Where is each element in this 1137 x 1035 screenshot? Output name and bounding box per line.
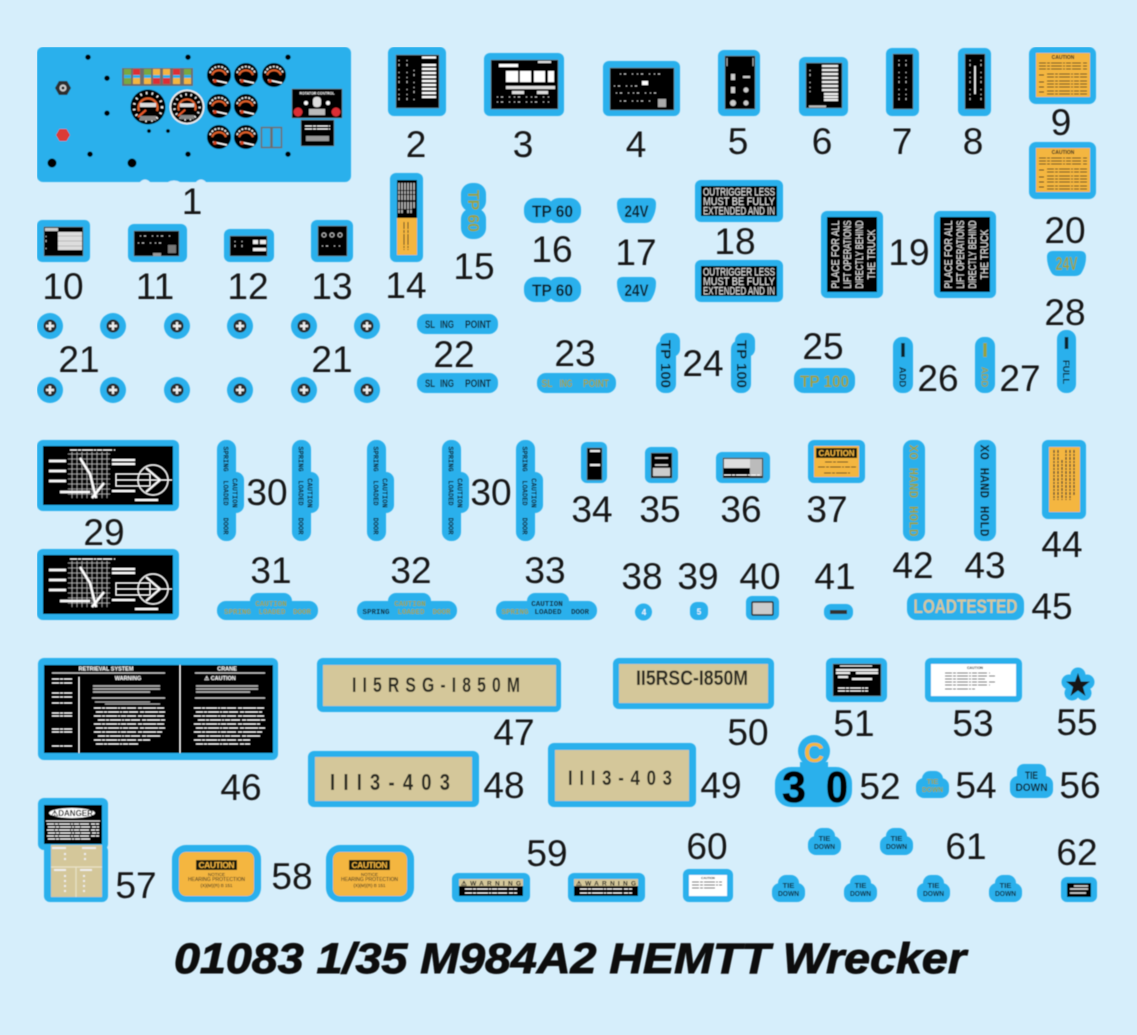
decal 32: [357, 593, 457, 620]
decal 33: [496, 593, 597, 620]
warning light strip: [122, 68, 193, 86]
decal 54: [916, 771, 949, 798]
label 30 right: 30: [470, 472, 512, 513]
label 31: 31: [250, 550, 292, 591]
decal 9: [1029, 47, 1096, 104]
decal 32: LOADED: [397, 609, 425, 617]
label 18: 18: [714, 221, 756, 262]
decal 24 left: TP 100: [658, 340, 674, 388]
decal 42: [903, 440, 925, 541]
label 40: 40: [739, 556, 781, 597]
label 34: 34: [571, 489, 613, 530]
decal 24 right: TP 100: [734, 340, 750, 388]
decal 46: WARNING: [115, 676, 141, 682]
decal 22 top: POINT: [465, 319, 491, 331]
label 53: 53: [952, 703, 994, 744]
label 16: 16: [531, 229, 573, 270]
decal 24V olive: [1047, 251, 1086, 276]
decal 46: CRANE: [217, 666, 237, 672]
label 17: 17: [615, 232, 657, 273]
decal 28: FULL: [1060, 360, 1071, 384]
decal 22 top: SL: [425, 319, 435, 331]
decal 60: CAUTION: [701, 876, 715, 880]
decal 41: [824, 604, 853, 620]
decal 50: II5RSC-I850M: [636, 667, 748, 690]
decal 25: TP 100: [800, 372, 849, 391]
decal 58 right: HEARING PROTECTION: [341, 877, 398, 883]
decal 31: LOADED: [258, 609, 286, 617]
label 37: 37: [806, 489, 848, 530]
label 44: 44: [1041, 524, 1083, 565]
label 23: 23: [554, 333, 596, 374]
decal 19 right: DIRECTLY BEHIND: [967, 220, 979, 288]
label 1: 1: [182, 181, 202, 222]
label 48: 48: [483, 765, 525, 806]
decal 58 right: (X)(M)(R) B 151: [353, 883, 386, 888]
decal 18 top: OUTRIGGER LESS: [703, 186, 775, 198]
label 38: 38: [621, 556, 663, 597]
control plate with red knobs: [292, 89, 342, 118]
decal 58 left: CAUTION: [198, 860, 234, 870]
decal 24 left: [656, 333, 680, 393]
decal 15: [461, 183, 486, 239]
label 14: 14: [385, 265, 427, 306]
title: 01083 1/35 M984A2 HEMTT Wrecker: [174, 935, 968, 983]
decal 42: XO HAND HOLD: [906, 444, 920, 537]
icon: red hexagon: [56, 129, 70, 141]
label 52: 52: [859, 766, 901, 807]
decal 57: ⚠DANGER: [51, 809, 93, 818]
label 25: 25: [802, 326, 844, 367]
decal 23: POINT: [583, 378, 609, 390]
decal 16 top: [524, 198, 581, 223]
decal 33: CAUTION: [531, 601, 563, 609]
decal 47: [317, 658, 561, 712]
label 27: 27: [999, 358, 1041, 399]
decal 32: SPRING: [362, 609, 390, 617]
label 35: 35: [639, 489, 681, 530]
decal 22 bottom: ING: [440, 378, 454, 390]
decal 22 bottom: POINT: [465, 378, 491, 390]
label 54: 54: [955, 765, 997, 806]
decal 53: [925, 658, 1022, 702]
decal 4: [603, 61, 680, 116]
decal 17 bottom: 24V: [624, 281, 649, 300]
decal 50: [613, 658, 774, 709]
decal 12: [224, 229, 274, 262]
label 22: 22: [433, 334, 475, 375]
decal 38: 4: [642, 608, 647, 617]
decal 39: 5: [697, 608, 702, 616]
decal 55: star: [1062, 668, 1094, 700]
decal 56: [1010, 764, 1053, 798]
decal 19 right: [934, 211, 996, 298]
label 7: 7: [892, 121, 912, 162]
label 50: 50: [727, 712, 769, 753]
decal 47: II5RSG-I850M: [352, 673, 520, 697]
decal 22 top: [417, 314, 498, 334]
decal 16 top: TP 60: [532, 202, 573, 221]
decal 20 caution: [1029, 142, 1096, 199]
decal 7: [886, 48, 919, 116]
label 55: 55: [1056, 702, 1098, 743]
decal 25: [794, 368, 855, 393]
twin switches: [262, 128, 282, 148]
decal 48: [308, 751, 479, 807]
decal 19 left: [821, 211, 883, 298]
decal 19 left: LIFT OPERATIONS: [842, 220, 854, 288]
decal 23: SL: [542, 378, 553, 390]
decal 18 bottom: MUST BE FULLY: [703, 276, 776, 288]
decal 46: ⚠ CAUTION: [204, 675, 236, 682]
decal 8: [958, 48, 991, 116]
decal 45: [907, 593, 1024, 620]
decal 26: [893, 337, 913, 393]
label 61: 61: [945, 826, 987, 867]
decal 19 right: THE TRUCK: [979, 229, 991, 280]
label 51: 51: [833, 703, 875, 744]
label 39: 39: [677, 556, 719, 597]
decal 18 bottom: OUTRIGGER LESS: [703, 266, 775, 278]
decal 18 top: EXTENDED AND IN: [703, 206, 775, 218]
label 19: 19: [888, 232, 930, 273]
decal 59 right: [568, 873, 645, 902]
decal 17 top: [617, 198, 656, 223]
label 41: 41: [814, 556, 856, 597]
label 15: 15: [453, 246, 495, 287]
decal 16 bottom: TP 60: [532, 281, 573, 300]
decal 24V olive: 24V: [1056, 254, 1078, 274]
decal 53: CAUTION: [967, 666, 983, 670]
decal 19 left: THE TRUCK: [866, 229, 878, 280]
decal 10: [37, 220, 90, 262]
decal 59 left: ⚠WARNING: [461, 880, 521, 888]
decal 24 right: [731, 333, 755, 393]
decal 58 left: HEARING PROTECTION: [188, 877, 245, 883]
decal 1: instrument panel: [37, 47, 351, 182]
decal 31: DOOR: [293, 609, 311, 617]
decal 52: [775, 735, 852, 812]
decal 5: [718, 50, 760, 116]
label 57: 57: [115, 865, 157, 906]
label 58: 58: [271, 856, 313, 897]
label 33: 33: [524, 550, 566, 591]
decal 45: LOADTESTED: [914, 597, 1018, 618]
label 12: 12: [227, 266, 269, 307]
decal 31: [217, 593, 318, 620]
decal 31: CAUTION: [255, 601, 287, 609]
decal 19 right: PLACE FOR ALL: [943, 220, 955, 288]
decal 17 top: 24V: [624, 202, 649, 221]
decal 38: [635, 604, 652, 620]
decal 22 top: ING: [440, 319, 454, 331]
label 20: 20: [1044, 210, 1086, 251]
label 3: 3: [513, 124, 533, 165]
decal 29 bottom: [37, 549, 179, 620]
decal 28: [1057, 330, 1076, 393]
label 36: 36: [720, 489, 762, 530]
decal 37: CAUTION: [818, 449, 855, 458]
decal 18 top: [695, 180, 783, 222]
decal 59 right: ⚠WARNING: [576, 880, 636, 888]
decal 27: ADD: [978, 367, 990, 387]
decal 40: [746, 596, 779, 620]
decal 17 bottom: [617, 277, 656, 302]
decal 19 right: LIFT OPERATIONS: [955, 220, 967, 288]
decal 49: III3-403: [568, 767, 672, 791]
decal 58 right: NOTICE: [361, 872, 378, 877]
decal 32: CAUTION: [394, 601, 426, 609]
decal 9: CAUTION: [1052, 55, 1075, 61]
label 46: 46: [220, 767, 262, 808]
decal 6: [799, 57, 848, 116]
label 11: 11: [136, 266, 174, 307]
decal 54: DOWN: [922, 785, 943, 794]
label 30 left: 30: [246, 472, 288, 513]
decal 23: ING: [560, 378, 572, 390]
decal 22 bottom: SL: [425, 378, 435, 390]
label 29: 29: [83, 512, 125, 553]
decal 58 left: (X)(M)(R) B 151: [200, 883, 233, 888]
decal 26: ADD: [896, 367, 908, 387]
decal 15: TP 60: [464, 190, 481, 232]
label 32: 32: [390, 550, 432, 591]
decal 62: [1061, 877, 1097, 902]
decal 58 left: [172, 845, 261, 902]
label 6: 6: [812, 121, 832, 162]
decal 19 left: PLACE FOR ALL: [830, 220, 842, 288]
decal 37: [808, 440, 865, 483]
decal 48: III3-403: [330, 770, 450, 796]
label 47: 47: [493, 712, 535, 753]
label 28: 28: [1044, 292, 1086, 333]
decal 29 top: [37, 440, 179, 511]
decal 2: [388, 47, 446, 116]
decal 58 left: NOTICE: [208, 872, 225, 877]
label 60: 60: [686, 826, 728, 867]
label 62: 62: [1056, 832, 1098, 873]
decal 58 right: CAUTION: [352, 860, 388, 870]
decal 52: C: [804, 737, 824, 768]
label 43: 43: [964, 545, 1006, 586]
icon: hex nut: [55, 81, 71, 95]
label 21 right: 21: [311, 339, 353, 380]
decal 39: [690, 602, 708, 620]
label 21 left: 21: [58, 339, 100, 380]
control plate with red knobs: ROTATOR CONTROL: [300, 92, 335, 96]
decal 35: [645, 447, 678, 483]
label 26: 26: [917, 358, 959, 399]
decal 33: DOOR: [571, 609, 589, 617]
data plate: [301, 120, 334, 146]
label 2: 2: [406, 124, 426, 165]
decal 43: XO HAND HOLD: [976, 444, 992, 537]
decal 49: [548, 743, 696, 807]
decal 20 caution: CAUTION: [1052, 150, 1075, 156]
label 56: 56: [1059, 765, 1101, 806]
label 42: 42: [892, 545, 934, 586]
decal 56: DOWN: [1016, 782, 1048, 794]
label 4: 4: [626, 124, 646, 165]
decal 16 bottom: [524, 277, 581, 302]
decal 46: [38, 658, 278, 760]
decal 51: [826, 658, 887, 702]
decals 21: screw heads: [37, 313, 380, 403]
label 45: 45: [1031, 586, 1073, 627]
label 9: 9: [1051, 102, 1071, 143]
label 24: 24: [682, 343, 724, 384]
decal 46: RETRIEVAL SYSTEM: [79, 666, 134, 672]
decal 32: DOOR: [432, 609, 451, 617]
decal 44: [1042, 440, 1086, 519]
label 10: 10: [42, 266, 84, 307]
decal 60: [683, 869, 733, 902]
decals 30: spring loaded strips: [217, 440, 543, 541]
decal 3: [484, 53, 564, 116]
decal 19 left: DIRECTLY BEHIND: [854, 220, 866, 288]
gauges: [130, 63, 286, 149]
decal 27: [975, 337, 995, 393]
decal 57: [38, 798, 108, 902]
decal 22 bottom: [417, 373, 498, 393]
label 5: 5: [728, 121, 748, 162]
label 8: 8: [963, 121, 983, 162]
decal 11: [128, 224, 187, 262]
decal 52: 3: [782, 763, 806, 812]
decal 54: TIE: [927, 777, 938, 786]
decal 59 left: [452, 873, 530, 902]
decal 18 bottom: [695, 260, 783, 302]
decal 18 top: MUST BE FULLY: [703, 196, 776, 208]
decals 61: tie down: [772, 828, 1022, 902]
label 13: 13: [311, 266, 353, 307]
decal 31: SPRING: [224, 609, 251, 617]
decal 43: [974, 440, 996, 541]
decal 33: LOADED: [534, 609, 562, 617]
decal 14: [390, 173, 423, 262]
decal 36: [716, 452, 770, 483]
decal 56: TIE: [1025, 770, 1038, 782]
decal 13: [311, 220, 353, 262]
decal 33: SPRING: [501, 609, 529, 617]
decal 58 right: [326, 845, 414, 902]
label 49: 49: [700, 765, 742, 806]
decal 23: [537, 373, 616, 393]
decal 34: [581, 442, 607, 483]
decal 52: 0: [826, 763, 848, 812]
label 59: 59: [526, 833, 568, 874]
decal 18 bottom: EXTENDED AND IN: [703, 286, 775, 298]
